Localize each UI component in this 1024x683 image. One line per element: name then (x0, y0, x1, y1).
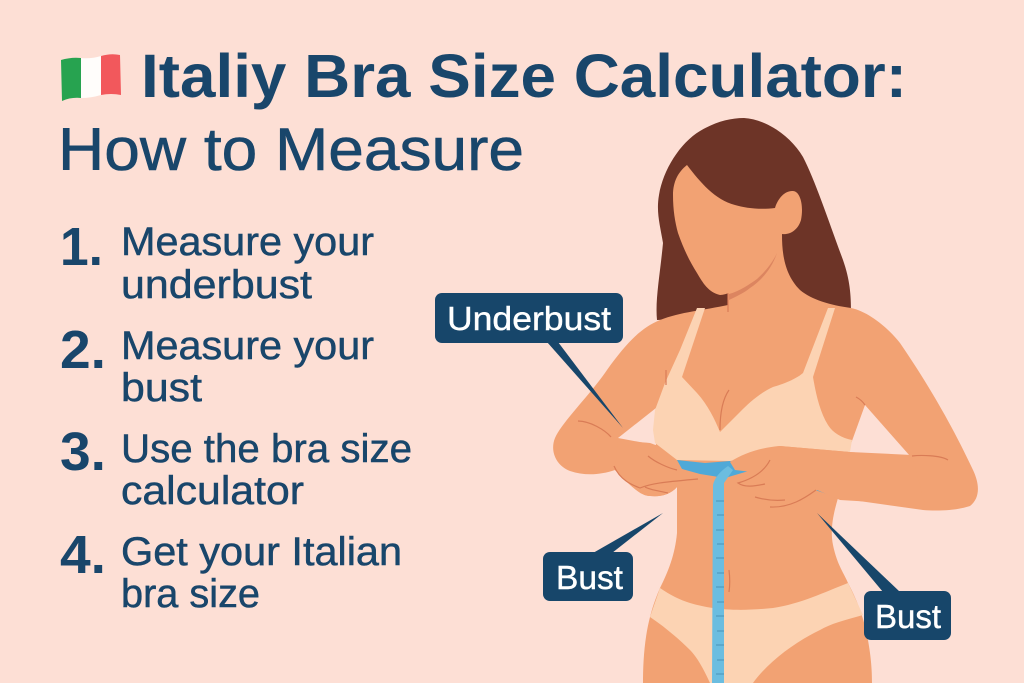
neck shadow (729, 253, 777, 300)
steps list (60, 217, 412, 616)
step 2: 2. (60, 320, 106, 380)
step 3 (60, 422, 412, 513)
step 1: underbust (121, 263, 312, 307)
step 1: Measure your (121, 220, 374, 264)
hair (657, 118, 851, 320)
step 2: bust (121, 366, 202, 410)
step 2 (60, 320, 374, 410)
left hand (615, 439, 700, 496)
step 1: 1. (60, 217, 103, 277)
bra (653, 308, 852, 461)
title: How to Measure (58, 116, 524, 183)
step 3: 3. (60, 422, 106, 482)
step 4 (60, 525, 402, 616)
body (553, 235, 978, 683)
callout: Bust right: Bust (875, 598, 941, 635)
title (58, 42, 907, 183)
underwear (650, 583, 863, 683)
title: Italiy Bra Size Calculator: (141, 42, 907, 110)
step 3: calculator (121, 469, 304, 513)
icon: Italian flag (61, 54, 121, 101)
right hand (730, 446, 925, 507)
step 4: Get your Italian (121, 530, 402, 574)
callout: Underbust: Underbust (447, 300, 611, 337)
step 2: Measure your (121, 324, 374, 368)
face (673, 165, 802, 295)
step 3: Use the bra size (121, 427, 412, 471)
illustration: woman measuring (553, 118, 978, 683)
callout: Bust right (817, 513, 951, 640)
callout: Bust left: Bust (556, 559, 623, 596)
step 1 (60, 217, 374, 307)
light gap right of torso (848, 405, 910, 456)
callout: Underbust (435, 293, 623, 428)
step 4: bra size (121, 572, 260, 616)
measuring tape band (677, 460, 752, 478)
step 4: 4. (60, 525, 106, 585)
body crease lines (578, 293, 948, 592)
light gap left of torso (618, 408, 656, 445)
callout: Bust left (543, 513, 663, 601)
vertical tape (712, 466, 733, 683)
